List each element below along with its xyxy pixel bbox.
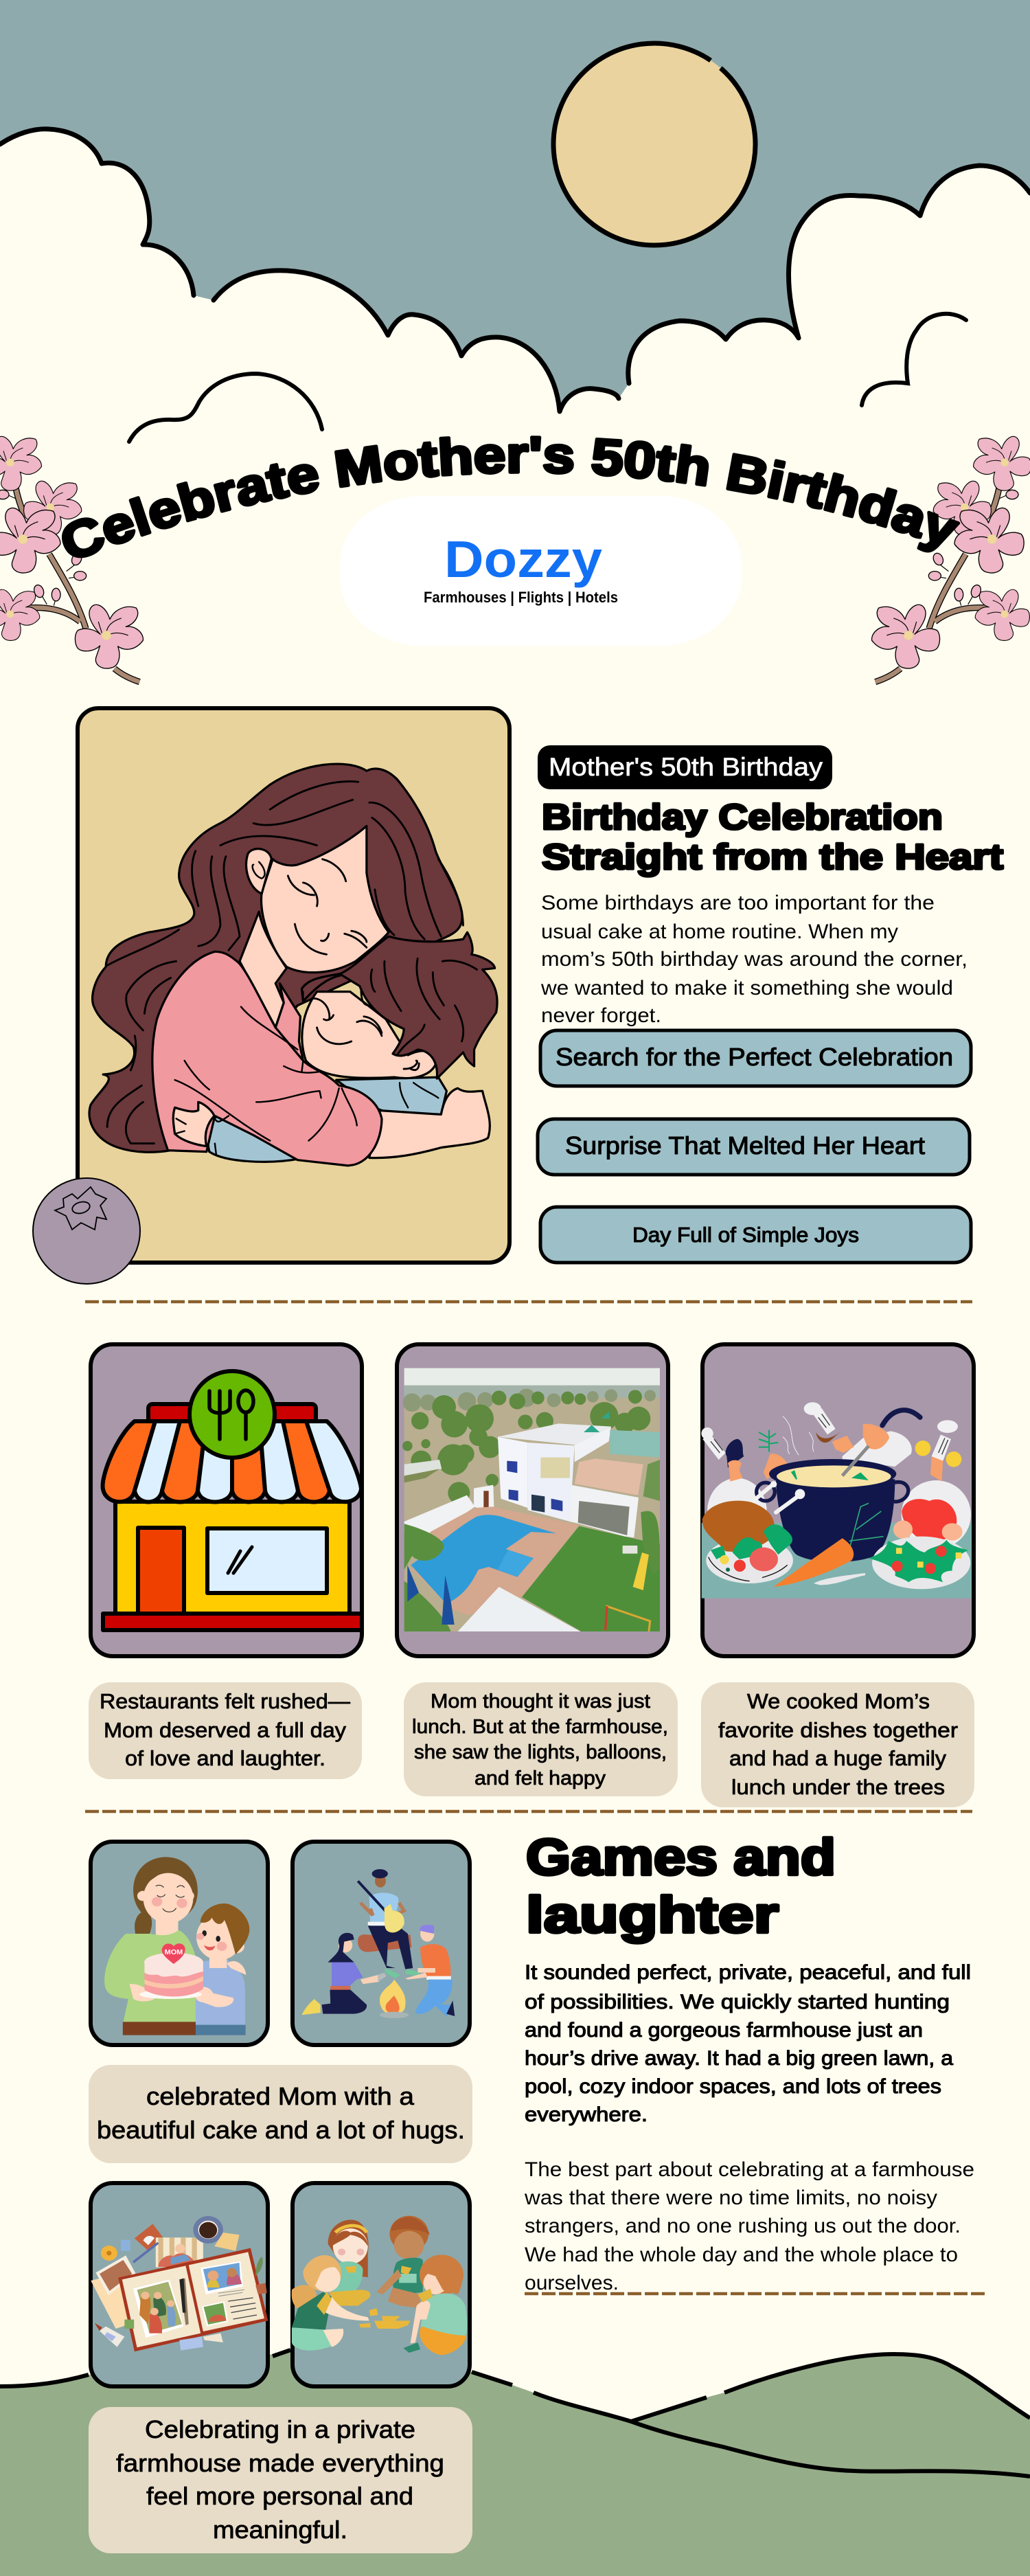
tag: Mother's 50th Birthday: Mother's 50th Birthday [549,753,823,781]
intro paragraph: we wanted to make it something she would [540,977,953,999]
button: simple joys: Day Full of Simple Joys [632,1223,859,1247]
button: surprise: Surprise That Melted Her Heart [565,1131,925,1160]
illustration: mother and son with cake [104,1857,249,2035]
caption: private farmhouse: Celebrating in a private [145,2415,415,2443]
caption: cooking [701,1682,974,1807]
title: Celebrate Mother's 50th Birthday [62,436,960,558]
illustration: kids playing cards [292,2216,467,2355]
panel: cake card [91,1842,268,2045]
button: search [540,1030,971,1086]
panel: campfire card [293,1842,470,2045]
paragraph: best part [524,2158,974,2294]
button: simple joys [540,1207,971,1263]
caption: farmhouse surprise: and felt happy [474,1767,606,1789]
heading: games and laughter [526,1829,836,1943]
left blossom branch [0,436,143,682]
panel: card game card [292,2183,470,2386]
paragraph: farmhouse discovery: hour’s drive away. It had a big green lawn, a [525,2047,953,2070]
panel: mother and child card [78,708,510,1263]
caption: cooking: lunch under the trees [731,1775,945,1799]
heading: birthday celebration: Straight from the Heart [542,837,1003,877]
clouds [0,129,1030,618]
caption: cake: beautiful cake and a lot of hugs. [97,2116,465,2144]
button: search: Search for the Perfect Celebration [556,1043,953,1071]
caption: restaurants [89,1682,362,1779]
paragraph: farmhouse discovery: It sounded perfect, private, peaceful, and full [525,1961,971,1984]
caption: private farmhouse [89,2407,472,2553]
illustration: family photo album [91,2216,268,2351]
paragraph: farmhouse discovery: everywhere. [525,2103,648,2126]
heading: games and laughter: laughter [526,1886,779,1943]
button: surprise [538,1119,970,1175]
heading: games and laughter: Games and [526,1829,836,1886]
illustration: mother hugging child [89,764,497,1166]
caption: private farmhouse: meaningful. [213,2516,347,2544]
intro paragraph [540,892,968,1027]
paragraph: farmhouse discovery: and found a gorgeous farmhouse just an [525,2019,923,2042]
panel: cooking card [701,1344,974,1656]
intro paragraph: usual cake at home routine. When my [541,920,898,943]
paragraph: best part: We had the whole day and the whole place to [525,2244,958,2266]
heading: birthday celebration: Birthday Celebration [542,798,943,837]
logo pill: Dozzy [444,530,602,588]
tag: Mother's 50th Birthday [538,745,832,789]
caption: private farmhouse: farmhouse made everything [116,2449,444,2477]
illustration: mother and son with cake: MOM [165,1949,183,1956]
panel: album card [91,2183,268,2386]
paragraph: best part: The best part about celebrating at a farmhouse [525,2158,974,2181]
paragraph: farmhouse discovery: of possibilities. We quickly started hunting [525,1991,950,2013]
right blossom branch [872,436,1030,682]
caption: cake: celebrated Mom with a [146,2082,415,2110]
caption: restaurants: of love and laughter. [125,1746,325,1770]
paragraph: farmhouse discovery: pool, cozy indoor spaces, and lots of trees [525,2075,941,2098]
caption: farmhouse surprise: lunch. But at the farmhouse, [412,1716,668,1738]
sky background [0,0,1030,426]
paragraph: best part: ourselves. [525,2272,619,2294]
heading: birthday celebration [542,798,1003,877]
illustration: chefs cooking around a pot [701,1402,972,1598]
sun [512,2,797,286]
caption: farmhouse surprise: Mom thought it was just [431,1691,650,1713]
intro paragraph: mom’s 50th birthday was around the corner, [541,948,968,971]
caption: cake [89,2065,472,2163]
green hills [0,2346,1030,2576]
logo pill: Farmhouses | Flights | Hotels [424,589,618,606]
icon: restaurant storefront [103,1371,362,1630]
blueberry badge circle [33,1178,140,1284]
paragraph: best part: strangers, and no one rushing us out the door. [525,2215,961,2237]
caption: private farmhouse: feel more personal and [146,2482,413,2510]
paragraph: best part: was that there were no time limits, no noisy [524,2187,937,2209]
intro paragraph: Some birthdays are too important for the [541,892,935,914]
panel: restaurant card [91,1344,362,1656]
logo pill [340,496,742,646]
caption: cooking: We cooked Mom’s [747,1689,930,1713]
illustration: friends singing round a campfire [301,1869,455,2018]
caption: farmhouse surprise: she saw the lights, balloons, [414,1741,667,1763]
intro paragraph: never forget. [541,1004,661,1027]
caption: cooking: and had a huge family [729,1746,947,1770]
image: aerial farmhouse with pool [402,1368,660,1631]
caption: restaurants: Mom deserved a full day [104,1718,347,1742]
caption: restaurants: Restaurants felt rushed— [100,1689,350,1713]
paragraph: farmhouse discovery [525,1961,971,2126]
caption: farmhouse surprise [404,1682,678,1796]
panel: farmhouse photo card [397,1344,668,1656]
caption: cooking: favorite dishes together [718,1718,958,1742]
